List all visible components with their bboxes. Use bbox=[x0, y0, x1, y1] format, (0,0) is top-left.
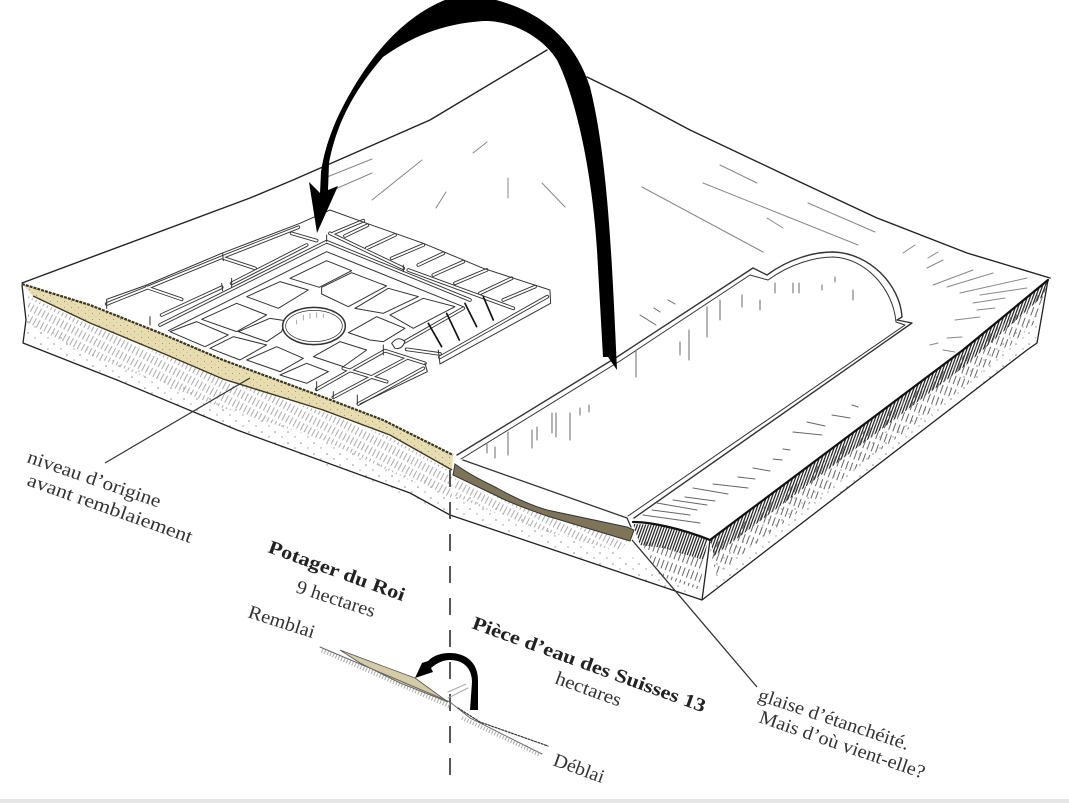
large black arrow from basin to potager bbox=[309, 0, 617, 370]
text: 9 hectares: 9 hectares bbox=[293, 577, 378, 622]
small section diagram bbox=[320, 647, 548, 755]
sand fill layer bbox=[22, 284, 634, 541]
side hatching patterns bbox=[26, 280, 1048, 596]
basin front edge bbox=[463, 460, 631, 527]
parterre beds bbox=[170, 261, 455, 383]
terrain block bbox=[22, 50, 1050, 600]
right front edge bbox=[633, 280, 1048, 540]
label: Déblai: Déblai bbox=[550, 750, 607, 788]
pièce d'eau des Suisses basin bbox=[457, 252, 912, 527]
label: Remblai: Remblai bbox=[245, 602, 318, 643]
small curved arrow bbox=[415, 653, 478, 710]
label: niveau d'origine: niveau d’origine bbox=[24, 447, 164, 512]
label: Mais d'où vient-elle: Mais d’où vient-elle? bbox=[756, 707, 928, 783]
label: avant remblaiement: avant remblaiement bbox=[24, 470, 196, 548]
heading: Pièce d'eau des Suisses: Pièce d’eau des Suisses 13 bbox=[469, 613, 709, 717]
bottom grey strip bbox=[0, 799, 1069, 803]
text: hectares: hectares bbox=[552, 668, 624, 711]
clay layer bbox=[453, 464, 634, 541]
sketch rays on ground bbox=[327, 142, 1027, 523]
terrain top surface outline bbox=[22, 50, 1050, 283]
heading: Potager du Roi: Potager du Roi bbox=[265, 537, 408, 606]
block sides bbox=[22, 280, 1048, 600]
basin wall hatching bbox=[487, 277, 853, 458]
central pond bbox=[283, 307, 345, 345]
label: glaise d'étanchéité: glaise d’étanchéité. bbox=[755, 685, 912, 755]
potager walls bbox=[107, 221, 547, 404]
small basin and ramps bbox=[392, 339, 405, 349]
potager du roi bbox=[107, 210, 551, 404]
leader line: glaise bbox=[632, 540, 757, 687]
leader line: niveau d'origine bbox=[105, 378, 250, 463]
potager outline bbox=[107, 210, 551, 404]
vertical dashed divider bbox=[449, 470, 451, 775]
